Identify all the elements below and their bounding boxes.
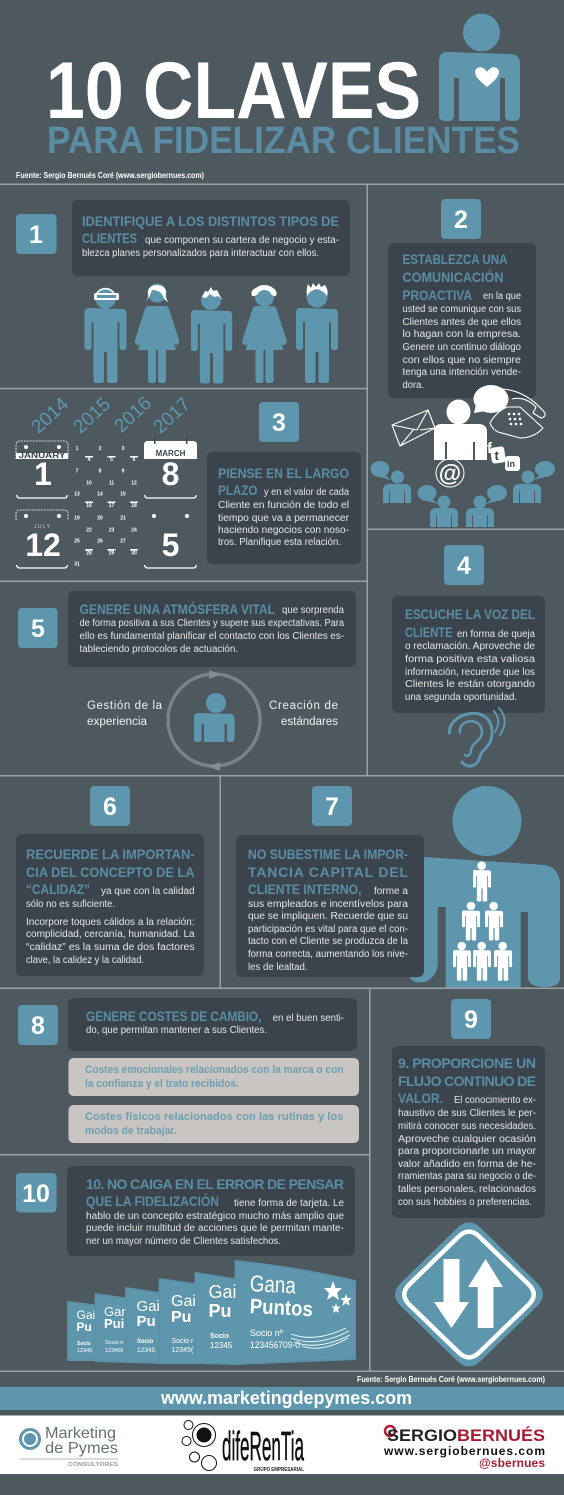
card 6: Socio nº: [250, 1328, 284, 1338]
day grid 1 to 31: 24: [131, 528, 137, 534]
icon: large person with team pyramid: [410, 786, 560, 988]
card 5: Gai: [208, 1282, 237, 1302]
card 3: Pu: [136, 1313, 156, 1330]
text box 1: CLIENTES: [82, 230, 137, 246]
day grid 1 to 31: 11: [109, 480, 114, 486]
badge 7: 7: [325, 793, 339, 821]
text box 4: [392, 596, 545, 713]
text box 7: forma correcta, aumentando los nive-: [248, 949, 408, 960]
text box 3: tiempo que va a permanecer: [218, 513, 350, 524]
icon: ear: [449, 708, 505, 766]
text box 4: CLIENTE: [405, 624, 452, 640]
website band: [0, 1387, 564, 1410]
card 1: Socio: [77, 1341, 91, 1347]
text box 5: ello es fundamental planificar el contacto con los Clientes es-: [80, 631, 344, 642]
day grid 1 to 31: 25: [74, 538, 80, 544]
text box 8: do, que permitan mantener a sus Clientes.: [86, 1025, 267, 1036]
text box 10: 10. NO CAIGA EN EL ERROR DE PENSAR: [86, 1176, 344, 1192]
panel 5: [18, 591, 356, 771]
text box 3: tros. Planifique esta relación.: [218, 537, 341, 548]
badge 1: 1: [29, 221, 43, 249]
badge 2: [441, 199, 481, 239]
text box 9: Aproveche cualquier ocasión: [398, 1134, 536, 1145]
logo: Diferentia: [182, 1420, 305, 1473]
panel 8: [18, 998, 359, 1143]
badge 5: 5: [31, 615, 45, 643]
text box 3: [207, 452, 361, 564]
day grid 1 to 31: 16: [86, 503, 92, 509]
panel 6: [16, 786, 204, 976]
panel 4: [392, 545, 545, 766]
card 4: Gai: [171, 1293, 196, 1310]
day grid 1 to 31: 14: [97, 492, 103, 498]
icon: audience with bubbles: [370, 461, 555, 527]
logo: Marketing de Pymes: [20, 1425, 118, 1468]
text box 10: ner un mayor número de Clientes satisfechos.: [86, 1236, 281, 1247]
badge 2: 2: [454, 206, 468, 234]
day grid 1 to 31: 21: [120, 516, 126, 522]
text box 2: ESTABLEZCA UNA: [402, 251, 508, 267]
text box 4: forma positiva esta valiosa: [405, 654, 535, 665]
card 4: Socio r: [172, 1338, 194, 1345]
day grid 1 to 31: 7: [76, 468, 79, 474]
footer source: Fuente: Sergio Bernués Coré (www.sergiobernues.com): [357, 1375, 545, 1384]
card 5: Pu: [208, 1301, 232, 1321]
loyalty cards: [68, 1261, 355, 1364]
card 4: 12345(: [172, 1347, 194, 1354]
day grid 1 to 31: [74, 446, 138, 568]
icon: social networks: f: [487, 440, 493, 457]
calendar: month 5: [144, 514, 196, 568]
panel 9: [392, 999, 545, 1367]
card 3: [136, 1298, 160, 1354]
calendar: January 1: 1: [34, 456, 52, 492]
text box 5: que sorprenda: [282, 605, 344, 616]
years: 2015: [70, 394, 115, 438]
day grid 1 to 31: 26: [97, 538, 103, 544]
text box 8: [68, 998, 357, 1051]
text box 5: de forma positiva a sus Clientes y supere sus expectativas. Para: [80, 618, 344, 629]
card 6: Puntos: [249, 1295, 313, 1321]
subtitle: PARA FIDELIZAR CLIENTES: [47, 120, 520, 162]
icon: envelope: [392, 410, 435, 446]
text box 4: Clientes le están otorgando: [405, 679, 535, 690]
text box 1: IDENTIFIQUE A LOS DISTINTOS TIPOS DE: [82, 213, 339, 229]
badge 6: [90, 786, 130, 826]
day grid 1 to 31: 19: [74, 516, 80, 522]
text box 9: talles personales, relacionados: [398, 1184, 536, 1195]
text box 10: tiene forma de tarjeta. Le: [234, 1198, 344, 1209]
calendar: December 12: J U L Y: [34, 524, 51, 530]
text box 8: GENERE COSTES DE CAMBIO,: [86, 1008, 262, 1024]
logo: Marketing de Pymes: de Pymes: [45, 1440, 118, 1457]
text box 7: les de lealtad.: [248, 962, 308, 973]
badge 3: [259, 402, 299, 442]
day grid 1 to 31: 4: [88, 457, 91, 463]
calendar sheets: [16, 437, 197, 568]
day grid 1 to 31: 3: [122, 446, 125, 452]
logo: Sergio Bernués: SERGIOBERNUÉS: [387, 1426, 545, 1445]
years: 2014: [28, 394, 73, 438]
text box 7: NO SUBESTIME LA IMPOR-: [248, 846, 408, 862]
panel 3: [16, 393, 361, 568]
text box 9: para proporcionarle un mayor: [398, 1146, 537, 1157]
day grid 1 to 31: 23: [109, 528, 114, 534]
calendar: March 8: [144, 437, 197, 498]
day grid 1 to 31: 8: [99, 468, 102, 474]
text box 9: [392, 1046, 545, 1218]
text box 6: [16, 834, 204, 976]
calendar: December 12: [16, 510, 68, 568]
badge 8: 8: [31, 1012, 45, 1040]
text box 9: con sus hobbies o preferencias.: [398, 1197, 532, 1208]
years: 2016: [111, 393, 156, 437]
text box 9: VALOR.: [398, 1090, 443, 1106]
card 1: 12345: [77, 1348, 92, 1354]
text box 6: ya que con la calidad: [101, 886, 195, 897]
day grid 1 to 31: 31: [74, 562, 80, 568]
text box 3: PLAZO: [218, 482, 258, 498]
card 1: [76, 1308, 95, 1354]
badge 9: [451, 999, 491, 1039]
text box 9: FLUJO CONTINUO DE: [398, 1073, 536, 1089]
card 2: Gar: [104, 1304, 126, 1319]
source: Fuente: Sergio Bernués Coré (www.sergiobernues.com): [16, 171, 204, 180]
text box 6: “calidaz” es la suma de dos factores: [26, 942, 195, 953]
icon: five client figures: [84, 283, 338, 384]
text box 2: tenga una intención vende-: [402, 367, 521, 378]
badge 4: 4: [457, 552, 471, 580]
text box 7: CLIENTE INTERNO,: [248, 881, 362, 897]
text box 2: lo hagan con la empresa.: [402, 329, 521, 340]
day grid 1 to 31: 5: [110, 457, 113, 463]
card 5: 12345: [210, 1341, 233, 1350]
text box 6: clave, la calidez y la calidad.: [26, 955, 144, 966]
text box 6: RECUERDE LA IMPORTAN-: [26, 846, 195, 862]
text box 7: participación es vital para que el con-: [248, 924, 408, 935]
text box 2: COMUNICACIÓN: [402, 268, 504, 285]
badge 7: [312, 786, 352, 826]
card 2: [104, 1304, 126, 1354]
card 2: 123456: [105, 1348, 123, 1354]
day grid 1 to 31: 15: [120, 492, 126, 498]
text box 2: PROACTIVA: [402, 287, 472, 303]
text box 10: hablo de un concepto estratégico mucho más amplio que: [86, 1211, 344, 1222]
logo: Sergio Bernués: @sbernues: [479, 1456, 545, 1470]
calendar: March 8: 8: [162, 456, 179, 492]
text box 3: haciendo negocios con noso-: [218, 525, 349, 536]
panel 7: [236, 786, 560, 988]
calendar: March 8: MARCH: [156, 449, 186, 458]
text box 6: CIA DEL CONCEPTO DE LA: [26, 864, 195, 880]
badge 5: [18, 608, 58, 648]
card 1: Gai: [76, 1308, 95, 1322]
text box 3: y en el valor de cada: [264, 487, 349, 498]
logo band: difeRenTia: [222, 1423, 304, 1469]
text box 6: Incorpore toques cálidos a la relación:: [26, 917, 195, 928]
day grid 1 to 31: 6: [133, 457, 136, 463]
text box 6: complicidad, cercanía, humanidad. La: [26, 929, 195, 940]
day grid 1 to 31: 27: [120, 538, 126, 544]
card 2: Socio n: [105, 1340, 123, 1346]
badge 4: [444, 545, 484, 585]
badge 9: 9: [464, 1006, 478, 1034]
text box 7: forme a: [374, 886, 408, 897]
text box 10: QUE LA FIDELIZACIÓN: [86, 1192, 219, 1209]
card 2: Pui: [104, 1316, 124, 1331]
callout: physical costs: Costes físicos relacionados con las rutinas y los: [85, 1111, 344, 1123]
text box 5: GENERE UNA ATMÓSFERA VITAL: [80, 600, 275, 617]
label right: Creación de: [269, 700, 338, 712]
text box 6: “CALIDAZ”: [26, 881, 90, 897]
calendar: month 5: 5: [162, 527, 179, 563]
card 6: [249, 1270, 352, 1350]
day grid 1 to 31: 2: [99, 446, 102, 452]
text box 9: 9. PROPORCIONE UN: [398, 1055, 536, 1071]
day grid 1 to 31: 13: [74, 492, 80, 498]
card 6: 123456709-0: [250, 1340, 300, 1350]
text box 7: [236, 835, 424, 977]
icon: social networks: t: [494, 448, 500, 463]
text box 4: información, recuerde que los: [405, 667, 535, 678]
card 6: Gana: [249, 1270, 297, 1298]
logo: Marketing de Pymes: Marketing: [45, 1425, 116, 1442]
icon: two-way traffic sign: [395, 1222, 543, 1367]
label right: estándares: [281, 716, 338, 728]
callout: physical costs: [68, 1105, 359, 1143]
text box 2: con ellos que no siempre: [402, 355, 521, 366]
icon: central person and bubble: [434, 385, 508, 460]
text box 5: tableciendo protocolos de actuación.: [80, 644, 238, 655]
years: [28, 393, 195, 438]
icon: social networks: in: [507, 459, 515, 469]
text box 1: [72, 200, 350, 276]
callout: emotional costs: Costes emocionales relacionados con la marca o con: [85, 1064, 344, 1076]
text box 8: en el buen senti-: [273, 1013, 344, 1024]
text box 1: blezca planes personalizados para interactuar con ellos.: [82, 248, 319, 259]
website band: www.marketingdepymes.com: [160, 1388, 412, 1408]
day grid 1 to 31: 18: [131, 503, 137, 509]
logo: Diferentia: GRUPO EMPRESARIAL: [254, 1467, 305, 1473]
text box 10: puede incluir multitud de acciones que le permitan mante-: [86, 1223, 344, 1234]
label left: experiencia: [87, 716, 148, 728]
calendar: January 1: JANUARY: [18, 451, 66, 460]
card 5: [208, 1282, 237, 1350]
calendar: December 12: 12: [25, 527, 61, 563]
text box 9: valor añadido en forma de he-: [398, 1159, 536, 1170]
callout: physical costs: modos de trabajar.: [85, 1125, 177, 1137]
text box 2: dora.: [402, 380, 424, 391]
cycle diagram: [168, 670, 260, 771]
text box 6: sólo no es suficiente.: [26, 899, 115, 910]
card 3: Socio: [137, 1339, 154, 1345]
badge 6: 6: [103, 793, 117, 821]
label left: Gestión de la: [87, 700, 163, 712]
badge 10: 10: [22, 1180, 50, 1208]
label right: [269, 700, 338, 728]
card 3: Gai: [136, 1298, 160, 1315]
icon: at sign: @: [439, 460, 461, 486]
logo band: [0, 1416, 564, 1474]
text box 4: ESCUCHE LA VOZ DEL: [405, 606, 535, 622]
text box 7: TANCIA CAPITAL DEL: [248, 864, 408, 880]
day grid 1 to 31: 22: [86, 528, 92, 534]
text box 3: PIENSE EN EL LARGO: [218, 465, 349, 481]
card 5: Socio: [210, 1333, 229, 1340]
day grid 1 to 31: 17: [109, 503, 114, 509]
text box 2: usted se comunique con sus: [402, 304, 521, 315]
card 4: [171, 1293, 196, 1354]
day grid 1 to 31: 1: [76, 446, 79, 452]
label left: [87, 700, 163, 728]
icon: person with heart: [439, 14, 520, 121]
text box 2: Genere un continuo diálogo: [402, 342, 521, 353]
badge 8: [18, 1005, 58, 1045]
text box 7: tacto con el Cliente se produzca de la: [248, 936, 408, 947]
text box 9: haustivo de sus Clientes le per-: [398, 1108, 536, 1119]
text box 2: en la que: [483, 291, 521, 302]
text box 3: Cliente en función de todo el: [218, 500, 349, 511]
icon: central person: [194, 693, 234, 742]
badge 3: 3: [272, 409, 286, 437]
logo: Marketing de Pymes: CONSULTORES: [68, 1462, 118, 1468]
logo: Sergio Bernués: [383, 1426, 545, 1470]
years: 2017: [150, 394, 195, 438]
card 4: Pu: [171, 1309, 191, 1326]
title: 10 CLAVES: [46, 46, 421, 136]
text box 2: [388, 243, 536, 398]
text box 9: rramientas para su negocio o de-: [398, 1171, 536, 1182]
day grid 1 to 31: 12: [131, 480, 137, 486]
day grid 1 to 31: 9: [122, 468, 125, 474]
text box 4: en forma de queja: [457, 629, 535, 640]
day grid 1 to 31: 29: [109, 550, 114, 556]
day grid 1 to 31: 30: [131, 550, 137, 556]
text box 1: que componen su cartera de negocio y esta-: [145, 235, 339, 246]
text box 2: Clientes antes de que ellos: [402, 317, 521, 328]
header: [16, 14, 520, 180]
text box 4: una segunda oportunidad.: [405, 692, 517, 703]
icon: telephone: [490, 389, 545, 438]
text box 7: que se impliquen. Recuerde que su: [248, 911, 408, 922]
calendar: January 1: [16, 441, 68, 498]
day grid 1 to 31: 10: [86, 480, 92, 486]
text box 4: o reclamación. Aproveche de: [405, 641, 535, 652]
panel 2: [370, 199, 555, 527]
text box 9: El conocimiento ex-: [454, 1095, 536, 1106]
panel 1: [16, 200, 350, 384]
icon: communication channels: [370, 385, 555, 527]
card 1: Pu: [76, 1320, 92, 1334]
callout: emotional costs: la confianza y el trato recibidos.: [85, 1078, 239, 1090]
day grid 1 to 31: 28: [86, 550, 92, 556]
text box 9: mitirá conocer sus necesidades.: [398, 1121, 536, 1132]
text box 5: [68, 591, 356, 667]
callout: emotional costs: [68, 1058, 359, 1096]
icon: social networks: [487, 440, 520, 471]
text box 10: [67, 1166, 355, 1256]
badge 10: [16, 1173, 56, 1212]
badge 1: [16, 214, 56, 254]
text box 7: sus empleados e incentívelos para: [248, 899, 408, 910]
card 3: 12345: [137, 1347, 155, 1354]
logo: Sergio Bernués: www.sergiobernues.com: [383, 1444, 545, 1458]
panel 10: [16, 1166, 355, 1364]
day grid 1 to 31: 20: [97, 516, 103, 522]
